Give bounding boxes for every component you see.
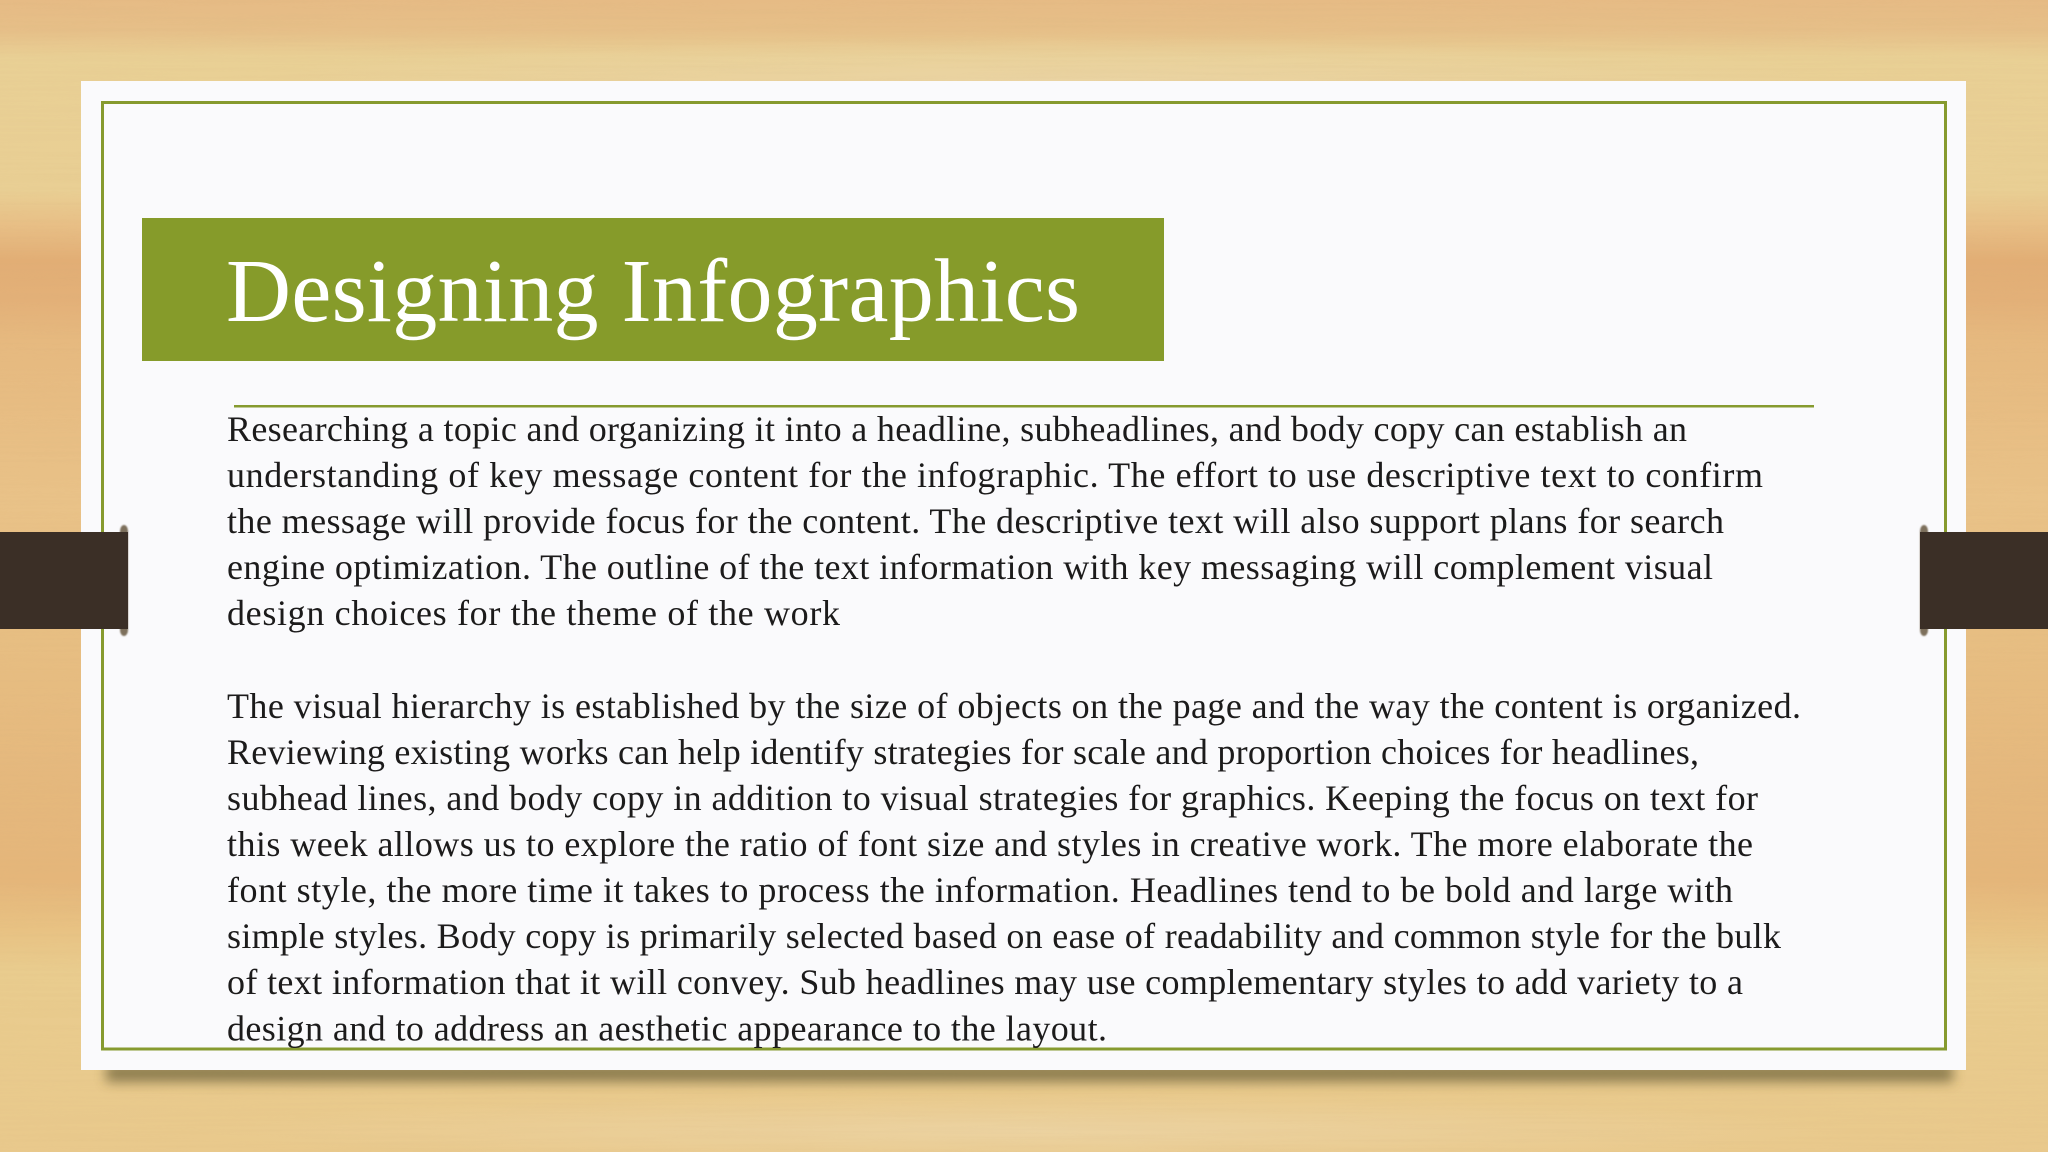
text block: paragraph one xyxy=(227,409,1763,633)
text block: paragraph two: this week allows us to explore the ratio of font size and styles in creative work. The more elaborate the xyxy=(227,824,1753,864)
text block: paragraph two: font style, the more time it takes to process the information. Headlines tend to be bold and large with xyxy=(227,870,1733,910)
title banner xyxy=(142,218,1164,361)
right strap xyxy=(1920,525,2048,636)
text block: paragraph one: design choices for the theme of the work xyxy=(227,593,840,633)
text block: paragraph two: The visual hierarchy is established by the size of objects on the page and the way the content is organized. xyxy=(227,686,1801,726)
text block: paragraph one: the message will provide focus for the content. The descriptive text will also support plans for search xyxy=(227,501,1724,541)
text block: paragraph one: understanding of key message content for the infographic. The effort to use descriptive text to confirm xyxy=(227,455,1763,495)
text block: paragraph two: Reviewing existing works can help identify strategies for scale and proportion choices for headlines, xyxy=(227,732,1699,772)
panel: white slide card xyxy=(81,81,1966,1070)
text block: paragraph one: Researching a topic and organizing it into a headline, subheadlines, and body copy can establish an xyxy=(227,409,1687,449)
text block: paragraph two: of text information that it will convey. Sub headlines may use complementary styles to add variety to a xyxy=(227,962,1743,1002)
card shadow xyxy=(106,1064,1953,1082)
text block: paragraph two: simple styles. Body copy is primarily selected based on ease of readability and common style for the bulk xyxy=(227,916,1781,956)
title: Designing Infographics xyxy=(226,242,1080,341)
heading rule xyxy=(234,405,1814,408)
left strap xyxy=(0,525,128,636)
text block: paragraph one: engine optimization. The outline of the text information with key messaging will complement visual xyxy=(227,547,1713,587)
text block: paragraph two: subhead lines, and body copy in addition to visual strategies for graphics. Keeping the focus on text for xyxy=(227,778,1758,818)
green inner border xyxy=(102,102,1946,1049)
text block: paragraph two: design and to address an aesthetic appearance to the layout. xyxy=(227,1008,1107,1048)
text block: paragraph two xyxy=(227,686,1801,1048)
